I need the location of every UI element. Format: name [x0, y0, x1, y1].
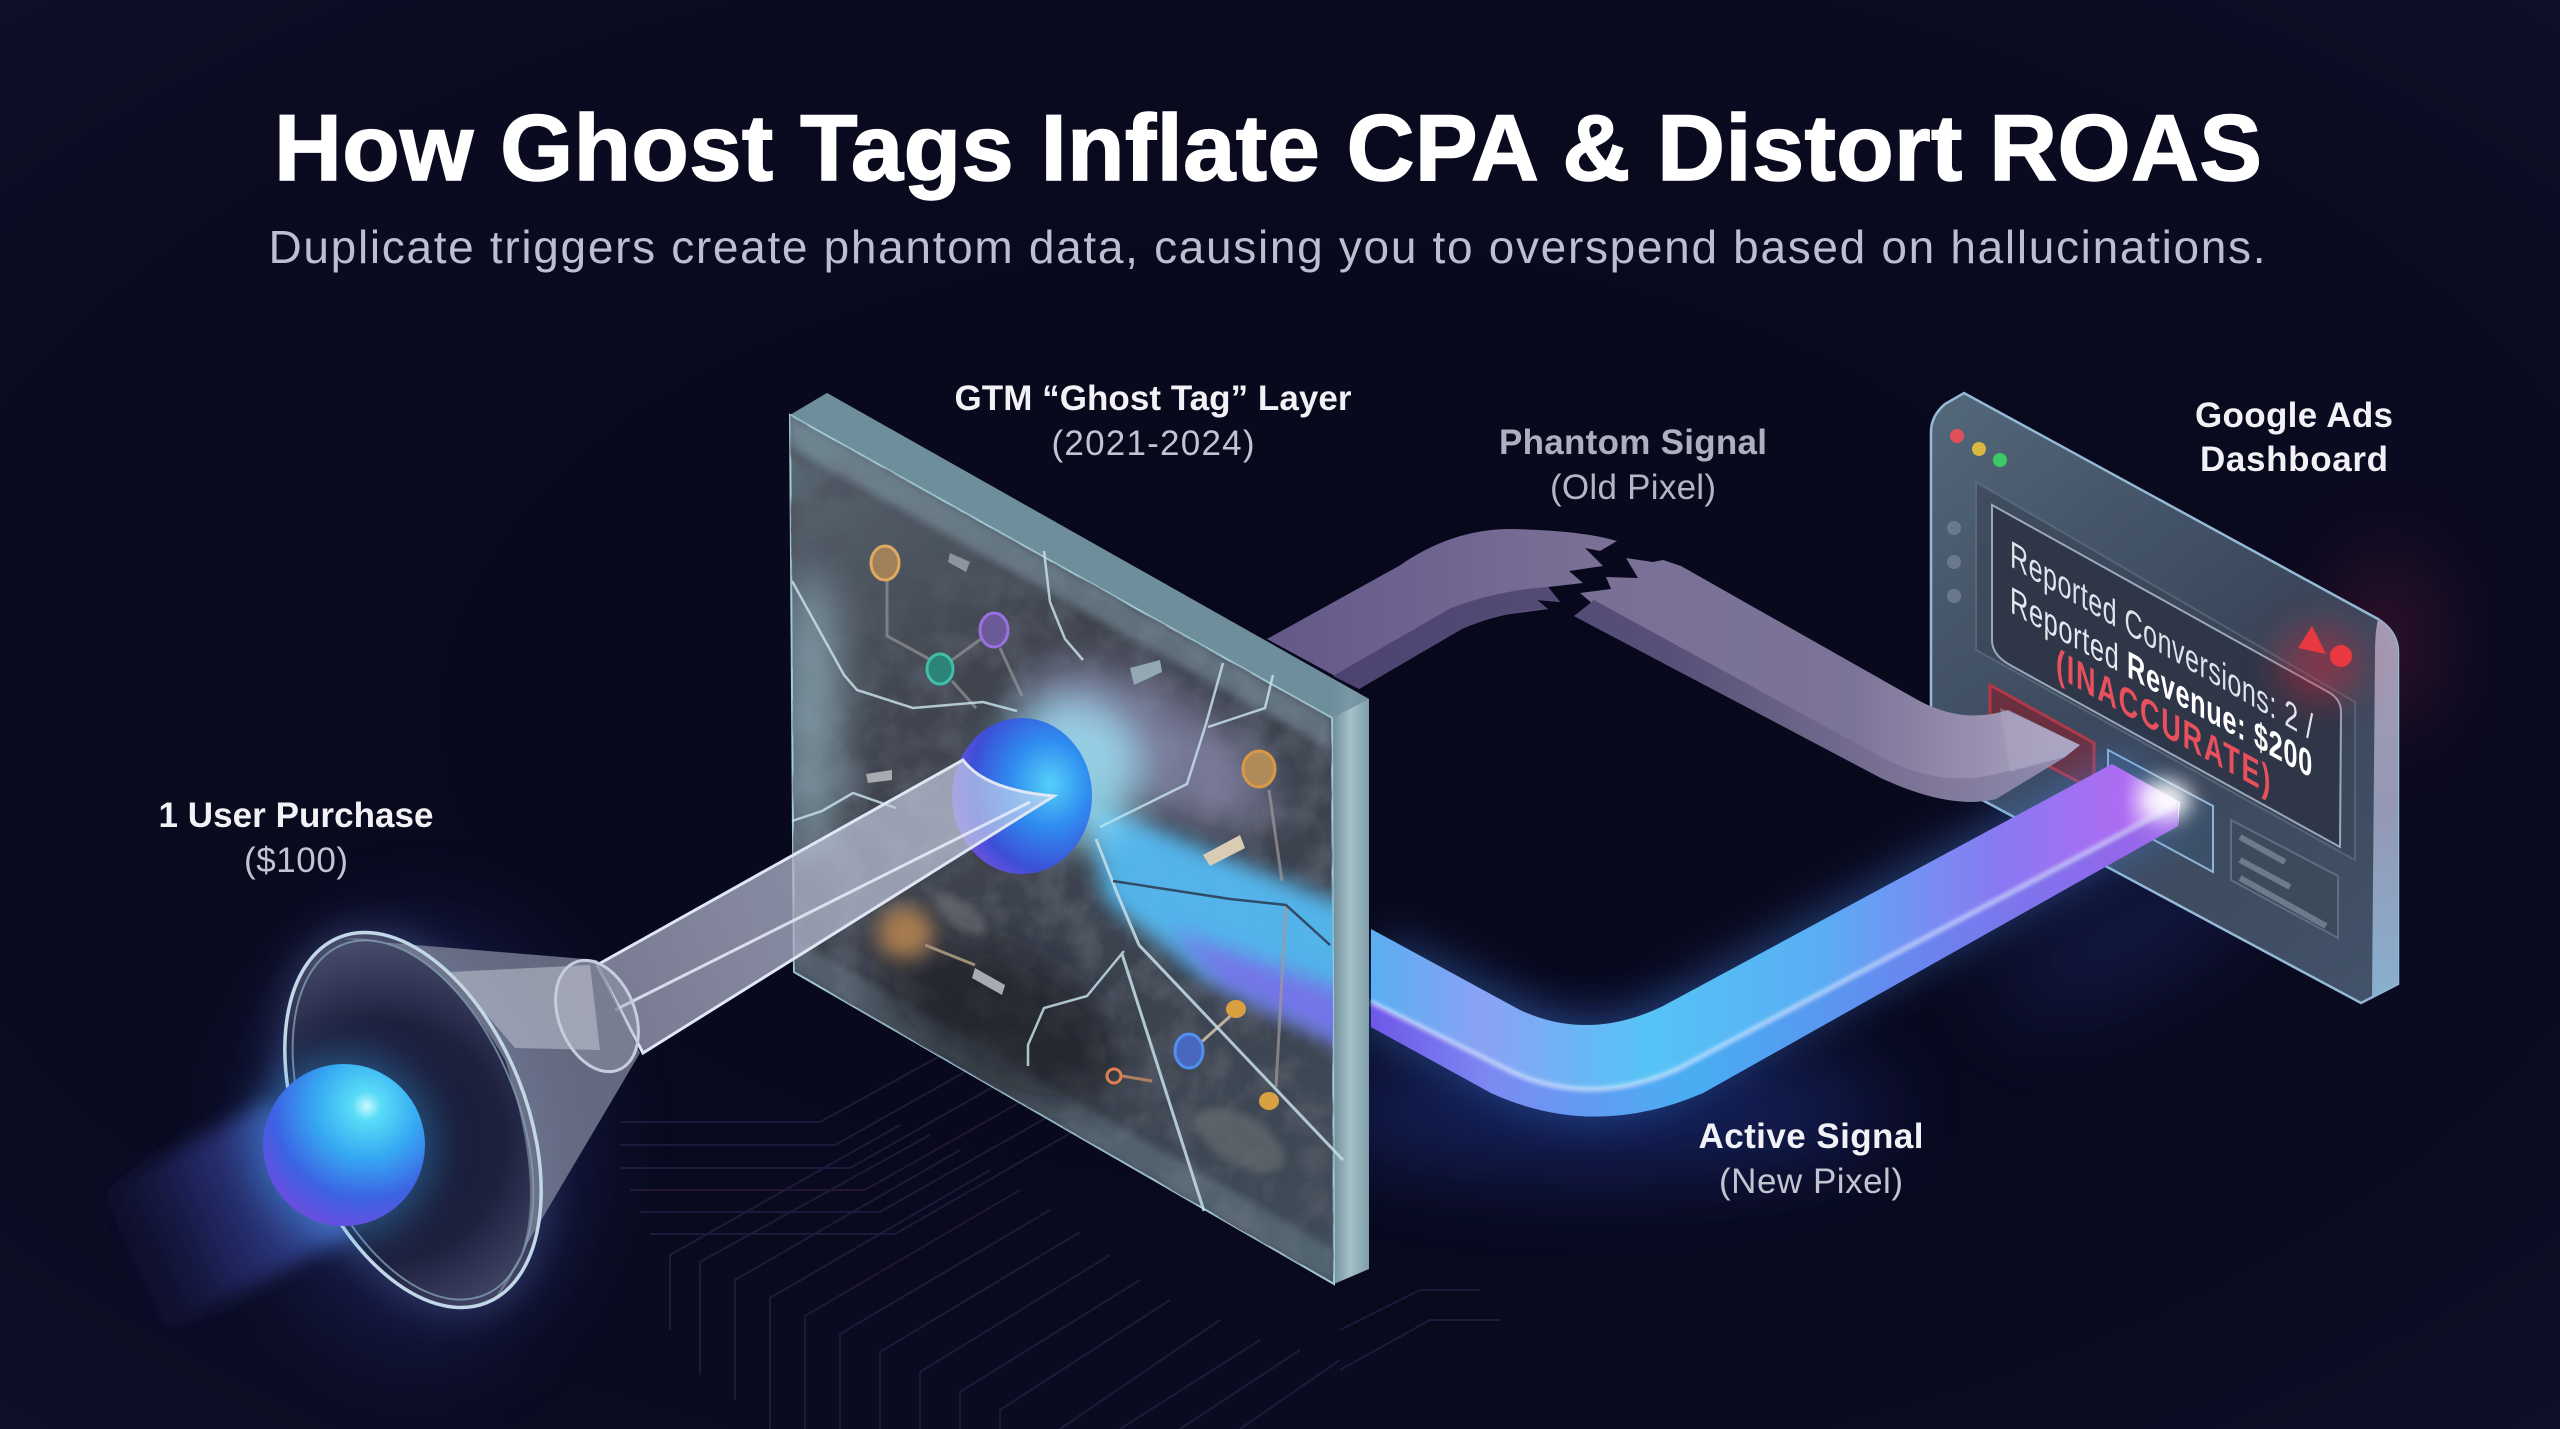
user purchase ball — [263, 1064, 425, 1226]
label: user purchase: ($100) — [244, 841, 348, 880]
glass front face — [790, 415, 1334, 1284]
dashboard body — [1931, 393, 2398, 1003]
ball glow — [252, 1053, 436, 1237]
user purchase funnel — [98, 890, 654, 1350]
dashboard panel — [1931, 393, 2398, 1003]
alert icons — [2298, 626, 2352, 667]
label: phantom signal: Phantom Signal — [1499, 423, 1767, 462]
list card — [2231, 820, 2338, 938]
funnel light wedge — [450, 965, 600, 1050]
dashboard side edge — [2361, 619, 2398, 1003]
glass interior shading — [790, 415, 1334, 1282]
funnel body — [344, 938, 640, 1300]
glass shards — [866, 553, 1295, 1186]
label: phantom signal — [1499, 423, 1767, 507]
subtitle: Duplicate triggers create phantom data, causing you to overspend based on hallucinations. — [268, 221, 2266, 273]
glass side and top edges — [790, 393, 1369, 1284]
beam tip glow — [2139, 780, 2191, 820]
beam lower face — [1371, 802, 2178, 1116]
funnel rim — [234, 895, 592, 1345]
glass nodes — [871, 546, 1286, 1110]
label: google ads dashboard: Dashboard — [2200, 440, 2388, 479]
reported metrics text: Reported Conversions: 2 / — [2010, 533, 2314, 750]
title: How Ghost Tags Inflate CPA & Distort ROAS — [274, 95, 2262, 200]
circuit board pattern — [620, 990, 1500, 1429]
right broken segment — [1574, 558, 2080, 802]
label: google ads dashboard — [2195, 396, 2393, 479]
glass cracks — [792, 551, 1343, 1211]
funnel glow — [229, 890, 597, 1350]
ball tail — [98, 1100, 356, 1337]
reported metrics text: (INACCURATE) — [2056, 639, 2270, 804]
red alert glow — [2280, 629, 2360, 701]
beam highlight — [1371, 804, 2178, 1089]
phantom signal (old pixel) — [1267, 529, 2080, 802]
window controls — [1950, 429, 2007, 467]
label: phantom signal: (Old Pixel) — [1550, 468, 1716, 507]
report card — [1992, 505, 2341, 847]
outer content frame — [1976, 482, 2355, 860]
left broken segment — [1267, 529, 1617, 689]
label: user purchase: 1 User Purchase — [158, 796, 434, 835]
label: active signal: (New Pixel) — [1719, 1162, 1903, 1201]
label: google ads dashboard: Google Ads — [2195, 396, 2393, 435]
sidebar dots — [1947, 521, 1961, 603]
beam top face — [1371, 764, 2180, 1116]
label: active signal: Active Signal — [1698, 1117, 1924, 1156]
label: GTM ghost tag layer: GTM “Ghost Tag” Layer — [954, 379, 1352, 418]
blue button — [2108, 750, 2213, 872]
label: user purchase — [158, 796, 434, 880]
label: GTM ghost tag layer: (2021-2024) — [1052, 424, 1254, 463]
tube highlight — [615, 802, 1030, 1010]
funnel inner — [234, 895, 592, 1345]
sphere glow — [998, 698, 1142, 842]
reported metrics text: Reported Revenue: $200 — [2010, 579, 2312, 787]
label: active signal — [1698, 1117, 1924, 1201]
funnel neck — [540, 948, 654, 1084]
GTM glass layer — [597, 393, 1369, 1300]
active signal (new pixel) — [1371, 764, 2191, 1116]
blue beam inside glass — [1080, 800, 1334, 1048]
label: GTM ghost tag layer — [954, 379, 1352, 463]
input tube — [597, 760, 1054, 1053]
red button — [1990, 685, 2094, 790]
data sphere in glass — [952, 718, 1092, 874]
background glows — [250, 550, 2430, 1360]
beam glow — [1371, 790, 2150, 1068]
